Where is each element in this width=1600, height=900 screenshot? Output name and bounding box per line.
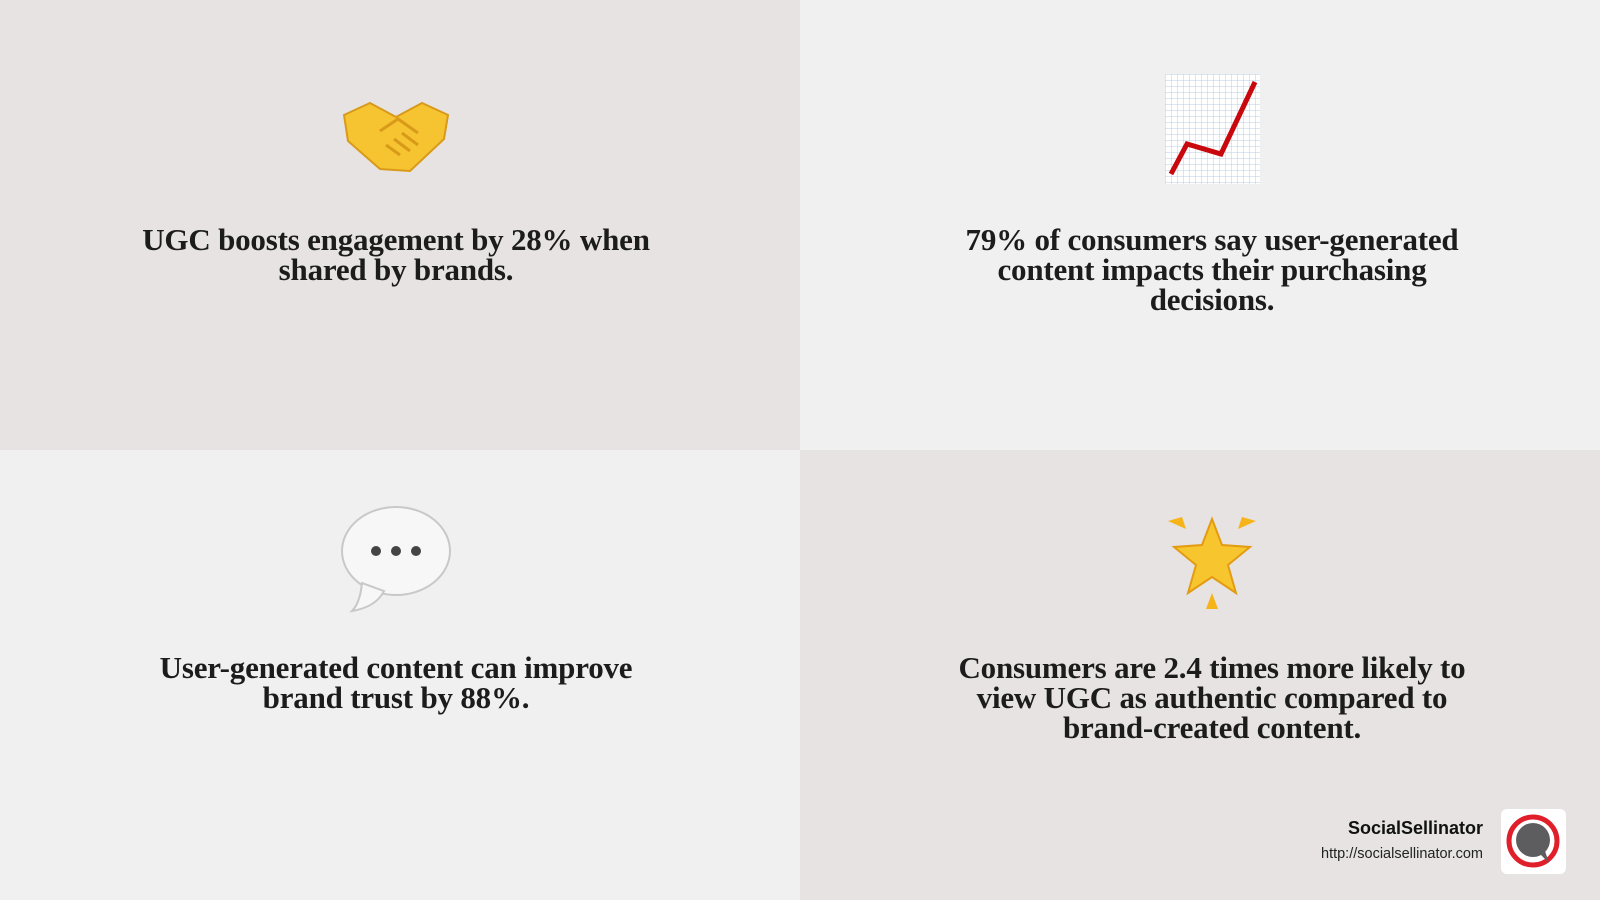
icon: speech bubble	[341, 506, 451, 612]
text: engagement stat: UGC boosts engagement by 28% when shared by brands.	[142, 222, 650, 287]
panel: authenticity	[800, 450, 1600, 900]
brand url: http://socialsellinator.com	[1321, 846, 1483, 862]
icon: star	[1168, 516, 1256, 609]
text: trust stat: User-generated content can improve brand trust by 88%.	[160, 650, 632, 715]
logo	[1501, 809, 1566, 874]
text: authenticity stat: Consumers are 2.4 times more likely to view UGC as authentic compared to brand-created content.	[958, 650, 1465, 745]
icon: handshake	[342, 102, 450, 172]
text: purchasing stat: 79% of consumers say user-generated content impacts their purchasing decisions.	[966, 222, 1458, 317]
brand name: SocialSellinator	[1348, 818, 1483, 838]
panel: engagement	[0, 0, 800, 450]
panel: purchasing	[800, 0, 1600, 450]
icon: chart	[1165, 74, 1260, 184]
brand block	[1321, 809, 1566, 874]
panel: trust	[0, 450, 800, 900]
